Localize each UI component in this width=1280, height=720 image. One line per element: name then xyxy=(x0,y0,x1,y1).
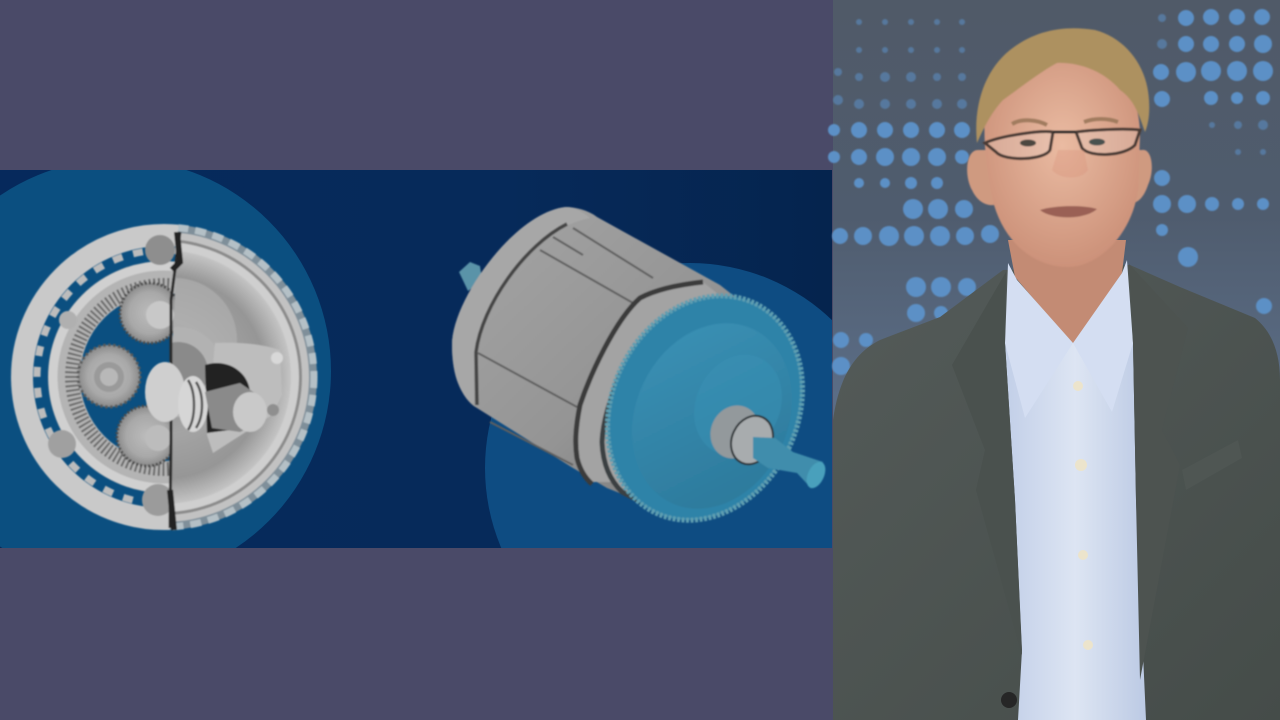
studio wall xyxy=(833,0,1280,720)
blue end cap xyxy=(606,295,803,521)
left stub shaft xyxy=(459,262,482,291)
background band xyxy=(0,0,832,720)
right half: silver housing xyxy=(169,223,318,532)
presenter: shirt xyxy=(1005,343,1146,720)
panel: presenter photo xyxy=(828,0,1280,720)
ears xyxy=(967,150,994,205)
presenter: lapels xyxy=(952,272,1022,655)
output shaft xyxy=(753,437,823,487)
nose xyxy=(1052,150,1088,178)
glasses xyxy=(985,129,1140,159)
planet gears xyxy=(48,235,180,516)
presenter: shirt collar xyxy=(1005,260,1133,418)
presenter: neck xyxy=(1008,240,1126,345)
presenter: jacket xyxy=(833,265,1280,720)
motor assembly xyxy=(451,206,826,524)
main grey drum xyxy=(452,206,735,494)
eyes xyxy=(1020,140,1036,146)
output bearing xyxy=(710,404,756,460)
first band highlight xyxy=(452,207,590,405)
presenter: jacket button xyxy=(1001,692,1017,708)
presenter: breast pocket xyxy=(1182,440,1242,490)
mouth xyxy=(1040,206,1097,217)
eyebrows xyxy=(1012,119,1118,125)
inner ring gear xyxy=(47,260,177,492)
presenter: shirt buttons xyxy=(1073,381,1093,650)
planetary gear cutaway xyxy=(11,224,317,530)
face xyxy=(984,58,1140,267)
panel: engineering render xyxy=(0,170,832,548)
left half: outer ring xyxy=(10,223,180,531)
rings xyxy=(578,283,716,492)
central shaft xyxy=(145,362,267,433)
presenter: head xyxy=(967,28,1152,267)
cut edge xyxy=(170,232,180,528)
hair xyxy=(976,28,1149,143)
wall dot pattern xyxy=(828,9,1273,375)
shaft mounting plate xyxy=(207,343,282,453)
drum grooves xyxy=(478,228,653,465)
